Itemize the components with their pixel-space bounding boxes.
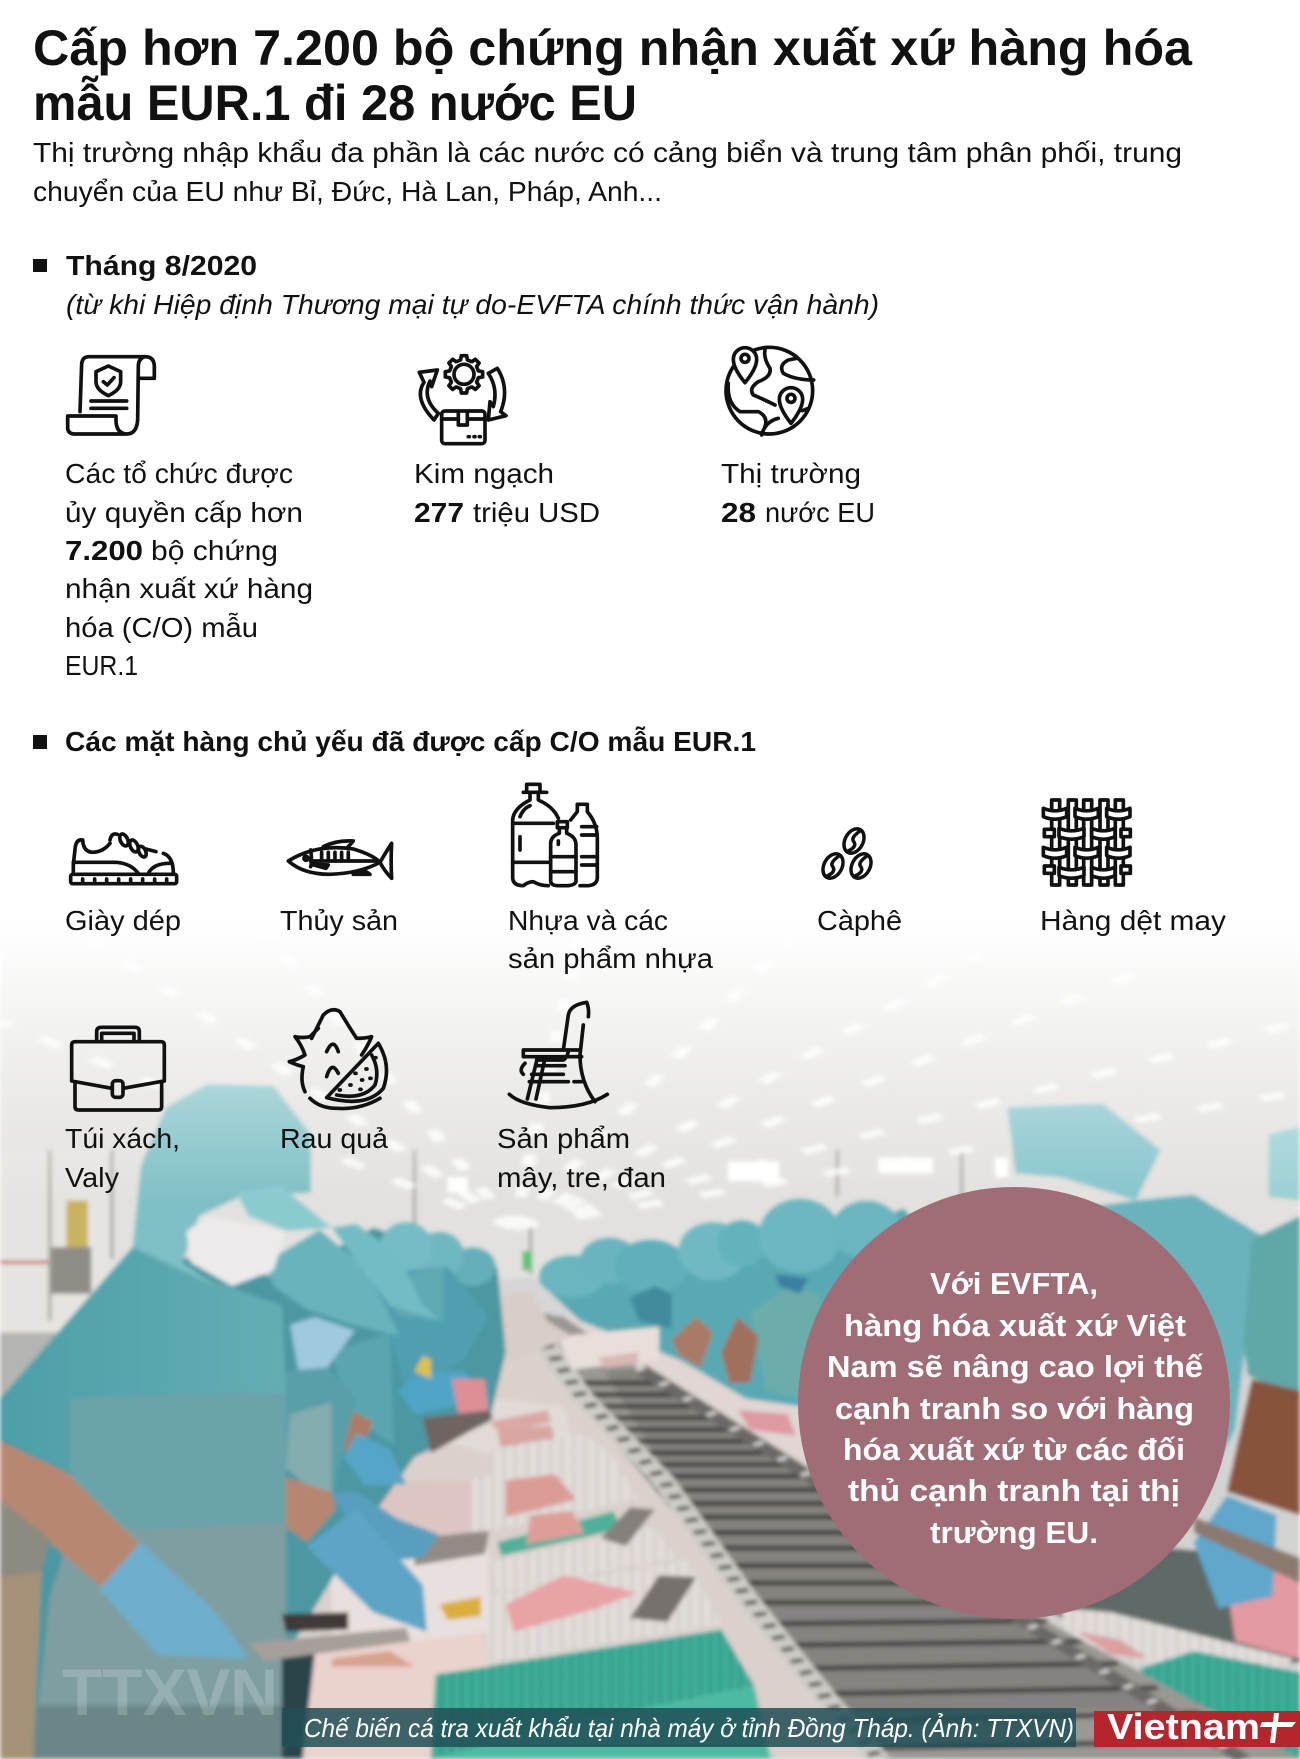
callout: EVFTA advantage circle xyxy=(798,1187,1230,1619)
section heading: Tháng 8/2020 xyxy=(33,250,879,320)
right workers xyxy=(539,1208,1020,1410)
section heading: main goods: Các mặt hàng chủ yếu đã được cấp C/O mẫu EUR.1 xyxy=(65,726,756,757)
far right worker xyxy=(1007,1103,1161,1200)
back wall xyxy=(0,917,1300,1336)
item: seafood xyxy=(280,841,398,936)
item: seafood: Thủy sản xyxy=(280,905,398,936)
item: plastics: sản phẩm nhựa xyxy=(508,943,713,974)
stat: certificates: 7.200 xyxy=(65,535,143,566)
icon: fish xyxy=(288,841,392,878)
title: Cấp hơn 7.200 bộ chứng nhận xuất xứ hàng hóa xyxy=(33,20,1193,76)
item: coffee: Càphê xyxy=(817,905,902,936)
stat: certificates: Các tổ chức được xyxy=(65,458,293,489)
watermark: TTXVN: TTXVN xyxy=(62,1655,278,1729)
stat: certificates: ủy quyền cấp hơn xyxy=(65,497,303,528)
stat: market xyxy=(721,347,875,528)
green baskets xyxy=(431,1630,754,1759)
stat: market: nước EU xyxy=(765,497,875,528)
stat: market: Thị trường xyxy=(721,458,861,489)
title xyxy=(33,20,1193,131)
callout: EVFTA advantage circle: Nam sẽ nâng cao lợi thế xyxy=(827,1349,1204,1384)
stat: export value xyxy=(414,356,600,528)
subtitle: Thị trường nhập khẩu đa phần là các nước có cảng biển và trung tâm phân phối, trung xyxy=(33,137,1182,168)
icon: dragon fruit and melon xyxy=(289,1010,387,1109)
icon: plastic bottles xyxy=(513,784,597,886)
item: rattan and bamboo: mây, tre, đan xyxy=(497,1162,666,1193)
left workers back xyxy=(449,1247,496,1286)
icon: certificate scroll xyxy=(68,357,154,434)
callout: EVFTA advantage circle: thủ cạnh tranh tại thị xyxy=(848,1473,1180,1508)
icon: coffee beans xyxy=(819,825,875,882)
item: fruit and vegetables: Rau quả xyxy=(280,1123,388,1154)
subtitle: chuyển của EU như Bỉ, Đức, Hà Lan, Pháp, Anh... xyxy=(33,176,662,207)
stat: export value: triệu USD xyxy=(473,497,600,528)
logo: Vietnam+: Vietnam xyxy=(1107,1706,1260,1747)
item: textiles: Hàng dệt may xyxy=(1040,905,1226,936)
item: plastics xyxy=(508,784,713,974)
table xyxy=(290,1632,489,1759)
icon: rocking chair xyxy=(509,1002,607,1108)
table base left of conveyor xyxy=(286,1313,879,1759)
icon: globe with pins xyxy=(726,347,814,435)
item: bags: Valy xyxy=(65,1162,119,1193)
arms and gloves xyxy=(0,1441,158,1589)
stat: certificates: EUR.1 xyxy=(65,650,138,681)
logo: Vietnam+ xyxy=(1094,1706,1300,1747)
item: footwear: Giày dép xyxy=(65,905,181,936)
icon: shoe xyxy=(71,833,177,884)
title: mẫu EUR.1 đi 28 nước EU xyxy=(33,75,637,131)
stat: certificates: bộ chứng xyxy=(151,535,278,566)
subtitle xyxy=(33,137,1182,207)
stat: certificates: nhận xuất xứ hàng xyxy=(65,573,313,604)
left workers base xyxy=(0,1228,506,1759)
ceiling lights xyxy=(0,932,1300,1228)
icon: briefcase xyxy=(72,1027,164,1110)
stat: certificates xyxy=(65,357,313,681)
baskets and fish xyxy=(557,1327,659,1369)
conveyor xyxy=(522,1309,1300,1759)
item: bags: Túi xách, xyxy=(65,1123,180,1154)
photo: fish processing factory line xyxy=(0,917,1300,1759)
callout: EVFTA advantage circle: hóa xuất xứ từ các đối xyxy=(843,1432,1185,1467)
photo caption: Chế biến cá tra xuất khẩu tại nhà máy ở tỉnh Đồng Tháp. (Ảnh: TTXVN) xyxy=(304,1712,1074,1743)
white fade over top of photo xyxy=(0,915,1300,1205)
item: fruit and vegetables xyxy=(280,1010,388,1154)
callout: EVFTA advantage circle: Với EVFTA, xyxy=(930,1266,1098,1301)
callout: EVFTA advantage circle: trường EU. xyxy=(930,1515,1098,1550)
first worker xyxy=(0,1247,286,1533)
callout: EVFTA advantage circle: hàng hóa xuất xứ Việt xyxy=(844,1308,1186,1343)
right lower fill xyxy=(829,1472,1300,1663)
stat: certificates: hóa (C/O) mẫu xyxy=(65,612,258,643)
icon: woven fabric xyxy=(1043,800,1130,885)
section heading: Tháng 8/2020: (từ khi Hiệp định Thương mại tự do-EVFTA chính thức vận hành) xyxy=(66,289,879,320)
item: plastics: Nhựa và các xyxy=(508,905,668,936)
icon: gear, arrows and box xyxy=(419,356,506,444)
item: textiles xyxy=(1040,800,1226,936)
callout: EVFTA advantage circle: cạnh tranh so với hàng xyxy=(835,1391,1194,1426)
stat: export value: 277 xyxy=(414,497,464,528)
item: rattan and bamboo: Sản phẩm xyxy=(497,1123,630,1154)
item: footwear xyxy=(65,833,181,936)
second worker xyxy=(265,1230,400,1336)
base right of conveyor xyxy=(564,1263,846,1480)
item: rattan and bamboo xyxy=(497,1002,666,1193)
section heading: Tháng 8/2020: Tháng 8/2020 xyxy=(66,250,257,281)
item: coffee xyxy=(817,825,902,936)
item: bags xyxy=(65,1027,180,1193)
stat: export value: Kim ngạch xyxy=(414,458,554,489)
stat: market: 28 xyxy=(721,497,756,528)
